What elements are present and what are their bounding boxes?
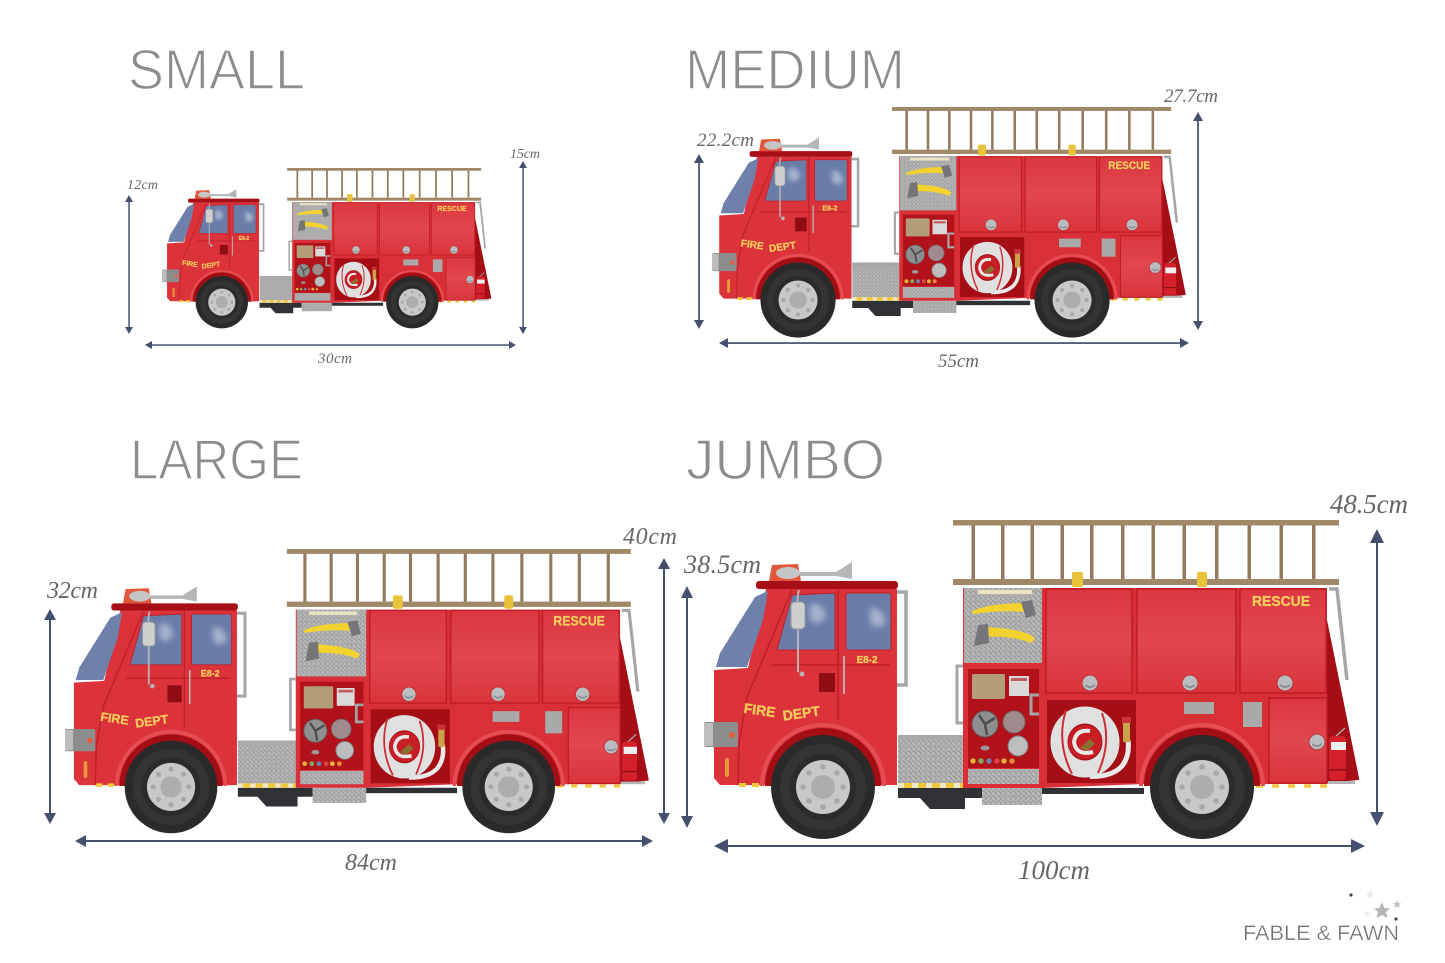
- truck: jumbo: DEPT: [782, 702, 821, 724]
- dimension labels: medium: 27.7cm: [1164, 86, 1218, 107]
- logo wordmark: FABLE & FAWN: [1243, 922, 1399, 945]
- truck: medium: RESCUE: [1108, 160, 1150, 172]
- truck: medium: E8-2: [822, 203, 837, 212]
- dimension labels: medium: 22.2cm: [697, 130, 754, 151]
- dimension labels: small: 15cm: [510, 147, 540, 162]
- arrow: small width: [145, 341, 516, 349]
- dimension labels: jumbo: 100cm: [1018, 855, 1090, 885]
- arrow: jumbo left height: [681, 586, 693, 828]
- dimension labels: jumbo: 48.5cm: [1330, 489, 1408, 519]
- dimension labels: large: 84cm: [345, 850, 397, 876]
- truck: jumbo: [704, 520, 1359, 839]
- truck: large: RESCUE: [553, 614, 605, 629]
- logo: fable and fawn: [1243, 890, 1401, 945]
- heading: small: SMALL: [128, 38, 305, 102]
- dimension labels: small: [127, 147, 540, 367]
- truck: small: RESCUE: [437, 204, 467, 213]
- truck: medium: FIRE: [740, 238, 765, 253]
- arrow: medium width: [719, 338, 1189, 348]
- truck: large: FIRE: [100, 710, 130, 728]
- dimension labels: large: 32cm: [46, 578, 98, 604]
- arrow: small left height: [125, 195, 133, 334]
- truck: jumbo: E8-2: [856, 655, 878, 666]
- dimension labels: small: 30cm: [317, 351, 352, 367]
- truck: medium: [712, 107, 1186, 338]
- truck: small: E8-2: [239, 236, 249, 242]
- truck: large: DEPT: [134, 712, 170, 731]
- heading: jumbo: JUMBO: [686, 428, 885, 492]
- truck: medium: DEPT: [768, 240, 797, 255]
- dimension labels: medium: [697, 86, 1218, 372]
- arrow: medium right height: [1193, 112, 1203, 330]
- truck: small: DEPT: [201, 261, 222, 271]
- truck: small: [162, 168, 491, 328]
- logo stars: [1349, 890, 1401, 921]
- truck: large: E8-2: [201, 668, 220, 678]
- heading: medium: MEDIUM: [685, 38, 905, 102]
- arrow: jumbo right height: [1370, 529, 1384, 826]
- arrow: large left height: [44, 609, 56, 824]
- heading: large: LARGE: [130, 428, 303, 492]
- arrow: large width: [75, 835, 653, 847]
- truck: jumbo: FIRE: [743, 700, 777, 720]
- truck: jumbo: RESCUE: [1252, 593, 1310, 610]
- arrow: small right height: [519, 161, 527, 334]
- dimension labels: jumbo: [683, 489, 1408, 885]
- arrow: medium left height: [694, 154, 704, 329]
- dimension labels: small: 12cm: [127, 178, 158, 193]
- arrow: large right height: [658, 558, 670, 824]
- dimension labels: large: 40cm: [623, 524, 677, 550]
- arrow: jumbo width: [714, 839, 1365, 853]
- truck: small: FIRE: [181, 260, 199, 269]
- dimension labels: jumbo: 38.5cm: [683, 550, 761, 579]
- dimension labels: medium: 55cm: [938, 351, 979, 372]
- dimension labels: large: [46, 524, 677, 876]
- truck: large: [65, 549, 649, 833]
